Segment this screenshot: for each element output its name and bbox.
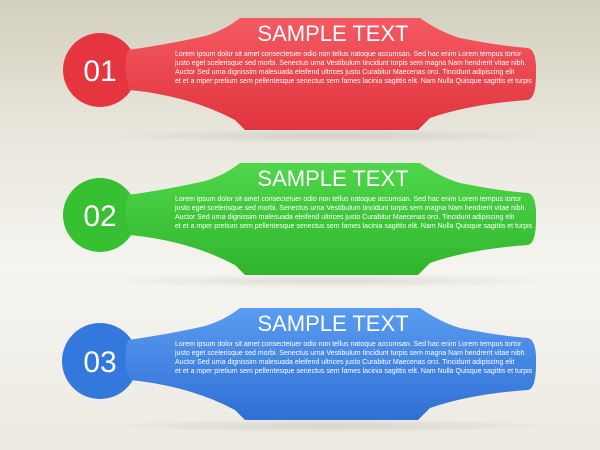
body text 3: [174, 341, 533, 375]
body text 3: Lorem ipsum dolor sit amet consectetuer odio non tellus natoque accumsan. Sed hac enim Lorem tempus tortor: [175, 341, 522, 348]
banner 1: red: [63, 18, 560, 143]
circle badge 03: [62, 323, 138, 399]
banner 2: green: [63, 163, 560, 288]
body text 1: [174, 51, 533, 85]
circle badge 02: [63, 178, 137, 252]
body text 3: justo eget scelerisque sed morbi. Senectus urna Vestibulum tincidunt turpis sem magna Nam hendrerit vitae nibh.: [174, 350, 526, 357]
circle badge 01: [63, 33, 137, 107]
title 1: SAMPLE TEXT: [257, 21, 409, 46]
body text 1: Auctor Sed urna dignissim malesuada eleifend ultrices justo Curabitur Maecenas orci. Tincidunt adipiscing elit: [175, 69, 514, 76]
body text 1: et et a mper pretium sem pellentesque senectus sem fames lacinia sagittis elit. Nam Nulla Quisque sagittis et turpis: [175, 78, 533, 85]
title 3: SAMPLE TEXT: [257, 311, 409, 336]
body text 1: justo eget scelerisque sed morbi. Senectus urna Vestibulum tincidunt turpis sem magna Nam hendrerit vitae nibh.: [174, 60, 526, 67]
body text 3: et et a mper pretium sem pellentesque senectus sem fames lacinia sagittis elit. Nam Nulla Quisque sagittis et turpis: [175, 368, 533, 375]
body text 2: justo eget scelerisque sed morbi. Senectus urna Vestibulum tincidunt turpis sem magna Nam hendrerit vitae nibh.: [174, 205, 526, 212]
circle badge 01: 01: [83, 55, 117, 88]
ribbon 2: [125, 163, 536, 275]
body text 3: Auctor Sed urna dignissim malesuada eleifend ultrices justo Curabitur Maecenas orci. Tincidunt adipiscing elit: [175, 359, 514, 366]
title 2: SAMPLE TEXT: [257, 166, 409, 191]
ribbon 1: [125, 18, 536, 130]
body text 2: Lorem ipsum dolor sit amet consectetuer odio non tellus natoque accumsan. Sed hac enim Lorem tempus tortor: [175, 196, 522, 203]
body text 2: Auctor Sed urna dignissim malesuada eleifend ultrices justo Curabitur Maecenas orci. Tincidunt adipiscing elit: [175, 214, 514, 221]
ribbon 3: [125, 308, 536, 420]
body text 2: [174, 196, 533, 230]
circle badge 03: 03: [83, 346, 117, 379]
circle badge 02: 02: [83, 200, 117, 233]
banner 3: blue: [62, 308, 560, 433]
body text 1: Lorem ipsum dolor sit amet consectetuer odio non tellus natoque accumsan. Sed hac enim Lorem tempus tortor: [175, 51, 522, 58]
body text 2: et et a mper pretium sem pellentesque senectus sem fames lacinia sagittis elit. Nam Nulla Quisque sagittis et turpis: [175, 223, 533, 230]
